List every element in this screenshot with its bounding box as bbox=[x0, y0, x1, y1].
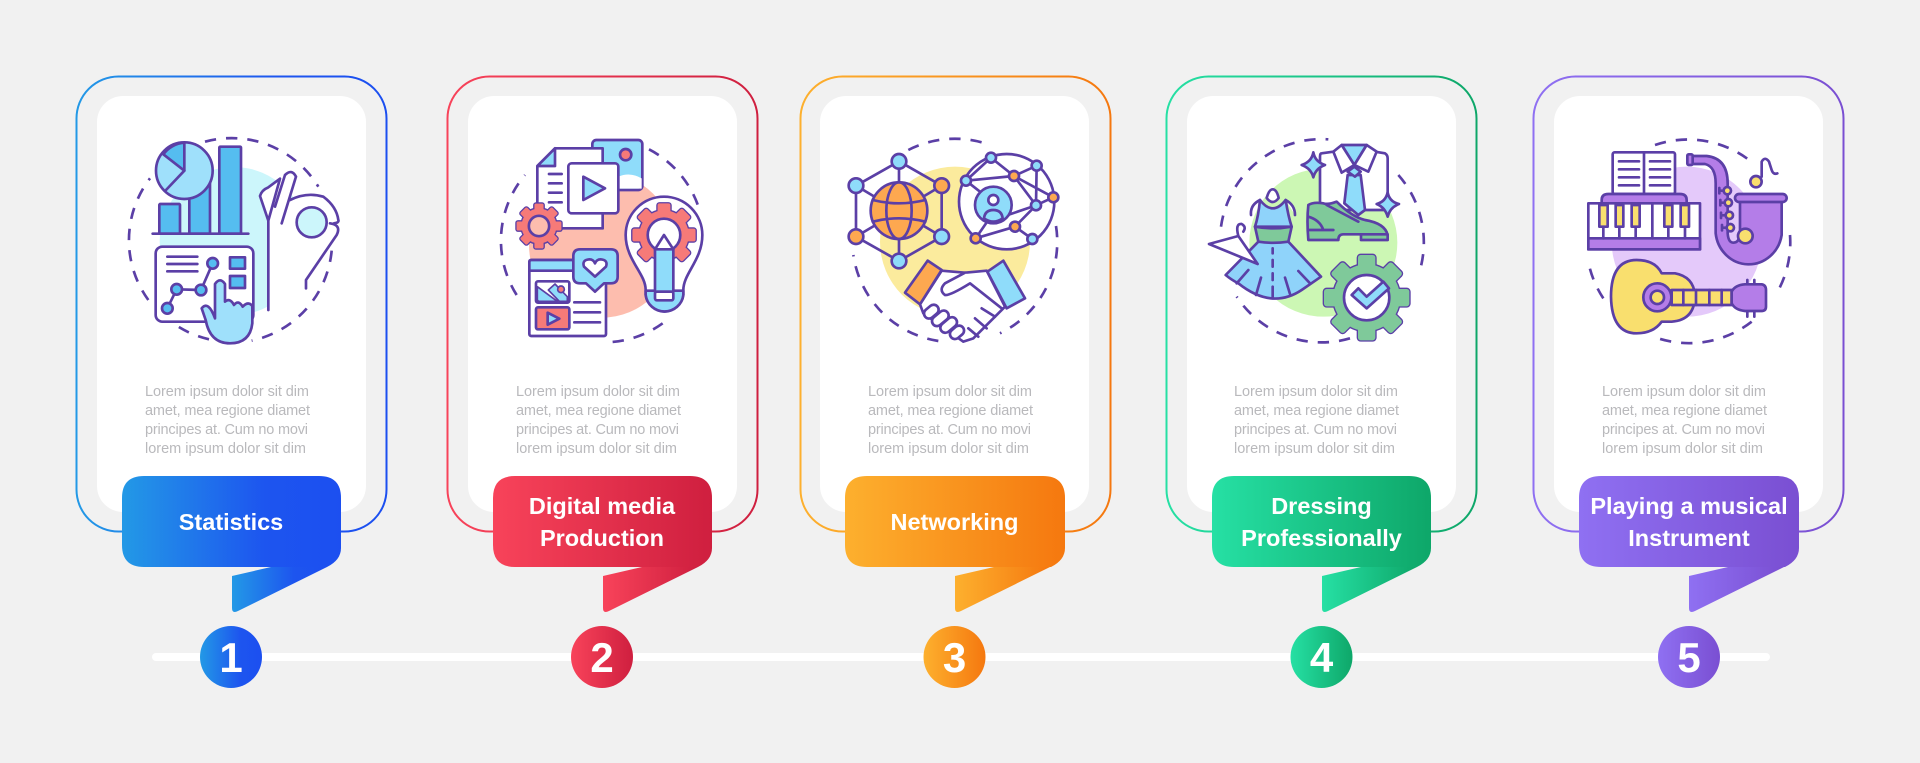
card 1 text: lorem ipsum dolor sit dim bbox=[145, 441, 306, 457]
card 3 text: lorem ipsum dolor sit dim bbox=[868, 441, 1029, 457]
step 1 badge bbox=[200, 626, 262, 688]
card 4 label tag: Professionally bbox=[1241, 525, 1402, 551]
card 3 text: amet, mea regione diamet bbox=[868, 403, 1033, 419]
card 4 label tag bbox=[1212, 476, 1431, 612]
card 4 text: lorem ipsum dolor sit dim bbox=[1234, 441, 1395, 457]
icon: digital media bbox=[501, 140, 702, 342]
card 3 text: Lorem ipsum dolor sit dim bbox=[868, 384, 1032, 400]
step 1 badge: 1 bbox=[219, 634, 243, 681]
card 4 white panel bbox=[1187, 96, 1456, 512]
panel: networking bbox=[800, 76, 1110, 688]
card 5 text: Lorem ipsum dolor sit dim bbox=[1602, 384, 1766, 400]
card 2 text: principes at. Cum no movi bbox=[516, 422, 679, 438]
icon: networking bbox=[849, 139, 1058, 342]
card 2 outline bbox=[448, 76, 758, 532]
card 1 label tag: Statistics bbox=[179, 509, 283, 535]
card 5 outline bbox=[1534, 76, 1844, 532]
card 1 text bbox=[145, 384, 310, 457]
icon: musical instruments bbox=[1588, 140, 1790, 343]
card 4 text bbox=[1234, 384, 1399, 457]
step 3 badge bbox=[924, 626, 986, 688]
step 4 badge bbox=[1290, 626, 1352, 688]
card 5 label tag bbox=[1579, 476, 1799, 612]
card 5 label tag: Playing a musical bbox=[1590, 493, 1788, 519]
card 3 label tag: Networking bbox=[891, 509, 1018, 535]
panel: statistics bbox=[76, 76, 386, 688]
card 3 label tag bbox=[845, 476, 1065, 612]
card 4 label tag: Dressing bbox=[1271, 493, 1372, 519]
card 2 white panel bbox=[468, 96, 737, 512]
card 4 text: principes at. Cum no movi bbox=[1234, 422, 1397, 438]
panel: digital media production bbox=[448, 76, 758, 688]
step 5 badge bbox=[1658, 626, 1720, 688]
card 4 text: amet, mea regione diamet bbox=[1234, 403, 1399, 419]
panel: playing a musical instrument bbox=[1534, 76, 1844, 688]
card 2 text: amet, mea regione diamet bbox=[516, 403, 681, 419]
card 1 text: principes at. Cum no movi bbox=[145, 422, 308, 438]
card 4 outline bbox=[1166, 76, 1476, 532]
icon: dressing bbox=[1209, 139, 1424, 342]
card 5 text: amet, mea regione diamet bbox=[1602, 403, 1767, 419]
timeline line bbox=[152, 653, 1770, 661]
card 1 outline bbox=[76, 76, 386, 532]
card 5 label tag: Instrument bbox=[1628, 525, 1750, 551]
step 5 badge: 5 bbox=[1677, 634, 1701, 681]
step 3 badge: 3 bbox=[943, 634, 966, 681]
card 1 text: amet, mea regione diamet bbox=[145, 403, 310, 419]
card 3 text: principes at. Cum no movi bbox=[868, 422, 1031, 438]
card 2 text: Lorem ipsum dolor sit dim bbox=[516, 384, 680, 400]
card 5 text: lorem ipsum dolor sit dim bbox=[1602, 441, 1763, 457]
card 2 text bbox=[516, 384, 681, 457]
card 1 label tag bbox=[122, 476, 341, 612]
icon: statistics bbox=[129, 138, 338, 343]
card 2 label tag bbox=[493, 476, 712, 612]
card 2 label tag: Digital media bbox=[529, 493, 676, 519]
card 5 white panel bbox=[1554, 96, 1823, 512]
card 5 text: principes at. Cum no movi bbox=[1602, 422, 1765, 438]
step 4 badge: 4 bbox=[1310, 634, 1334, 681]
card 5 text bbox=[1602, 384, 1767, 457]
step 2 badge bbox=[571, 626, 633, 688]
card 3 text bbox=[868, 384, 1033, 457]
card 4 text: Lorem ipsum dolor sit dim bbox=[1234, 384, 1398, 400]
step 2 badge: 2 bbox=[590, 634, 614, 681]
card 2 label tag: Production bbox=[540, 525, 664, 551]
card 3 white panel bbox=[820, 96, 1089, 512]
card 1 white panel bbox=[97, 96, 366, 512]
panel: dressing professionally bbox=[1166, 76, 1476, 688]
card 2 text: lorem ipsum dolor sit dim bbox=[516, 441, 677, 457]
card 1 text: Lorem ipsum dolor sit dim bbox=[145, 384, 309, 400]
card 3 outline bbox=[800, 76, 1110, 532]
